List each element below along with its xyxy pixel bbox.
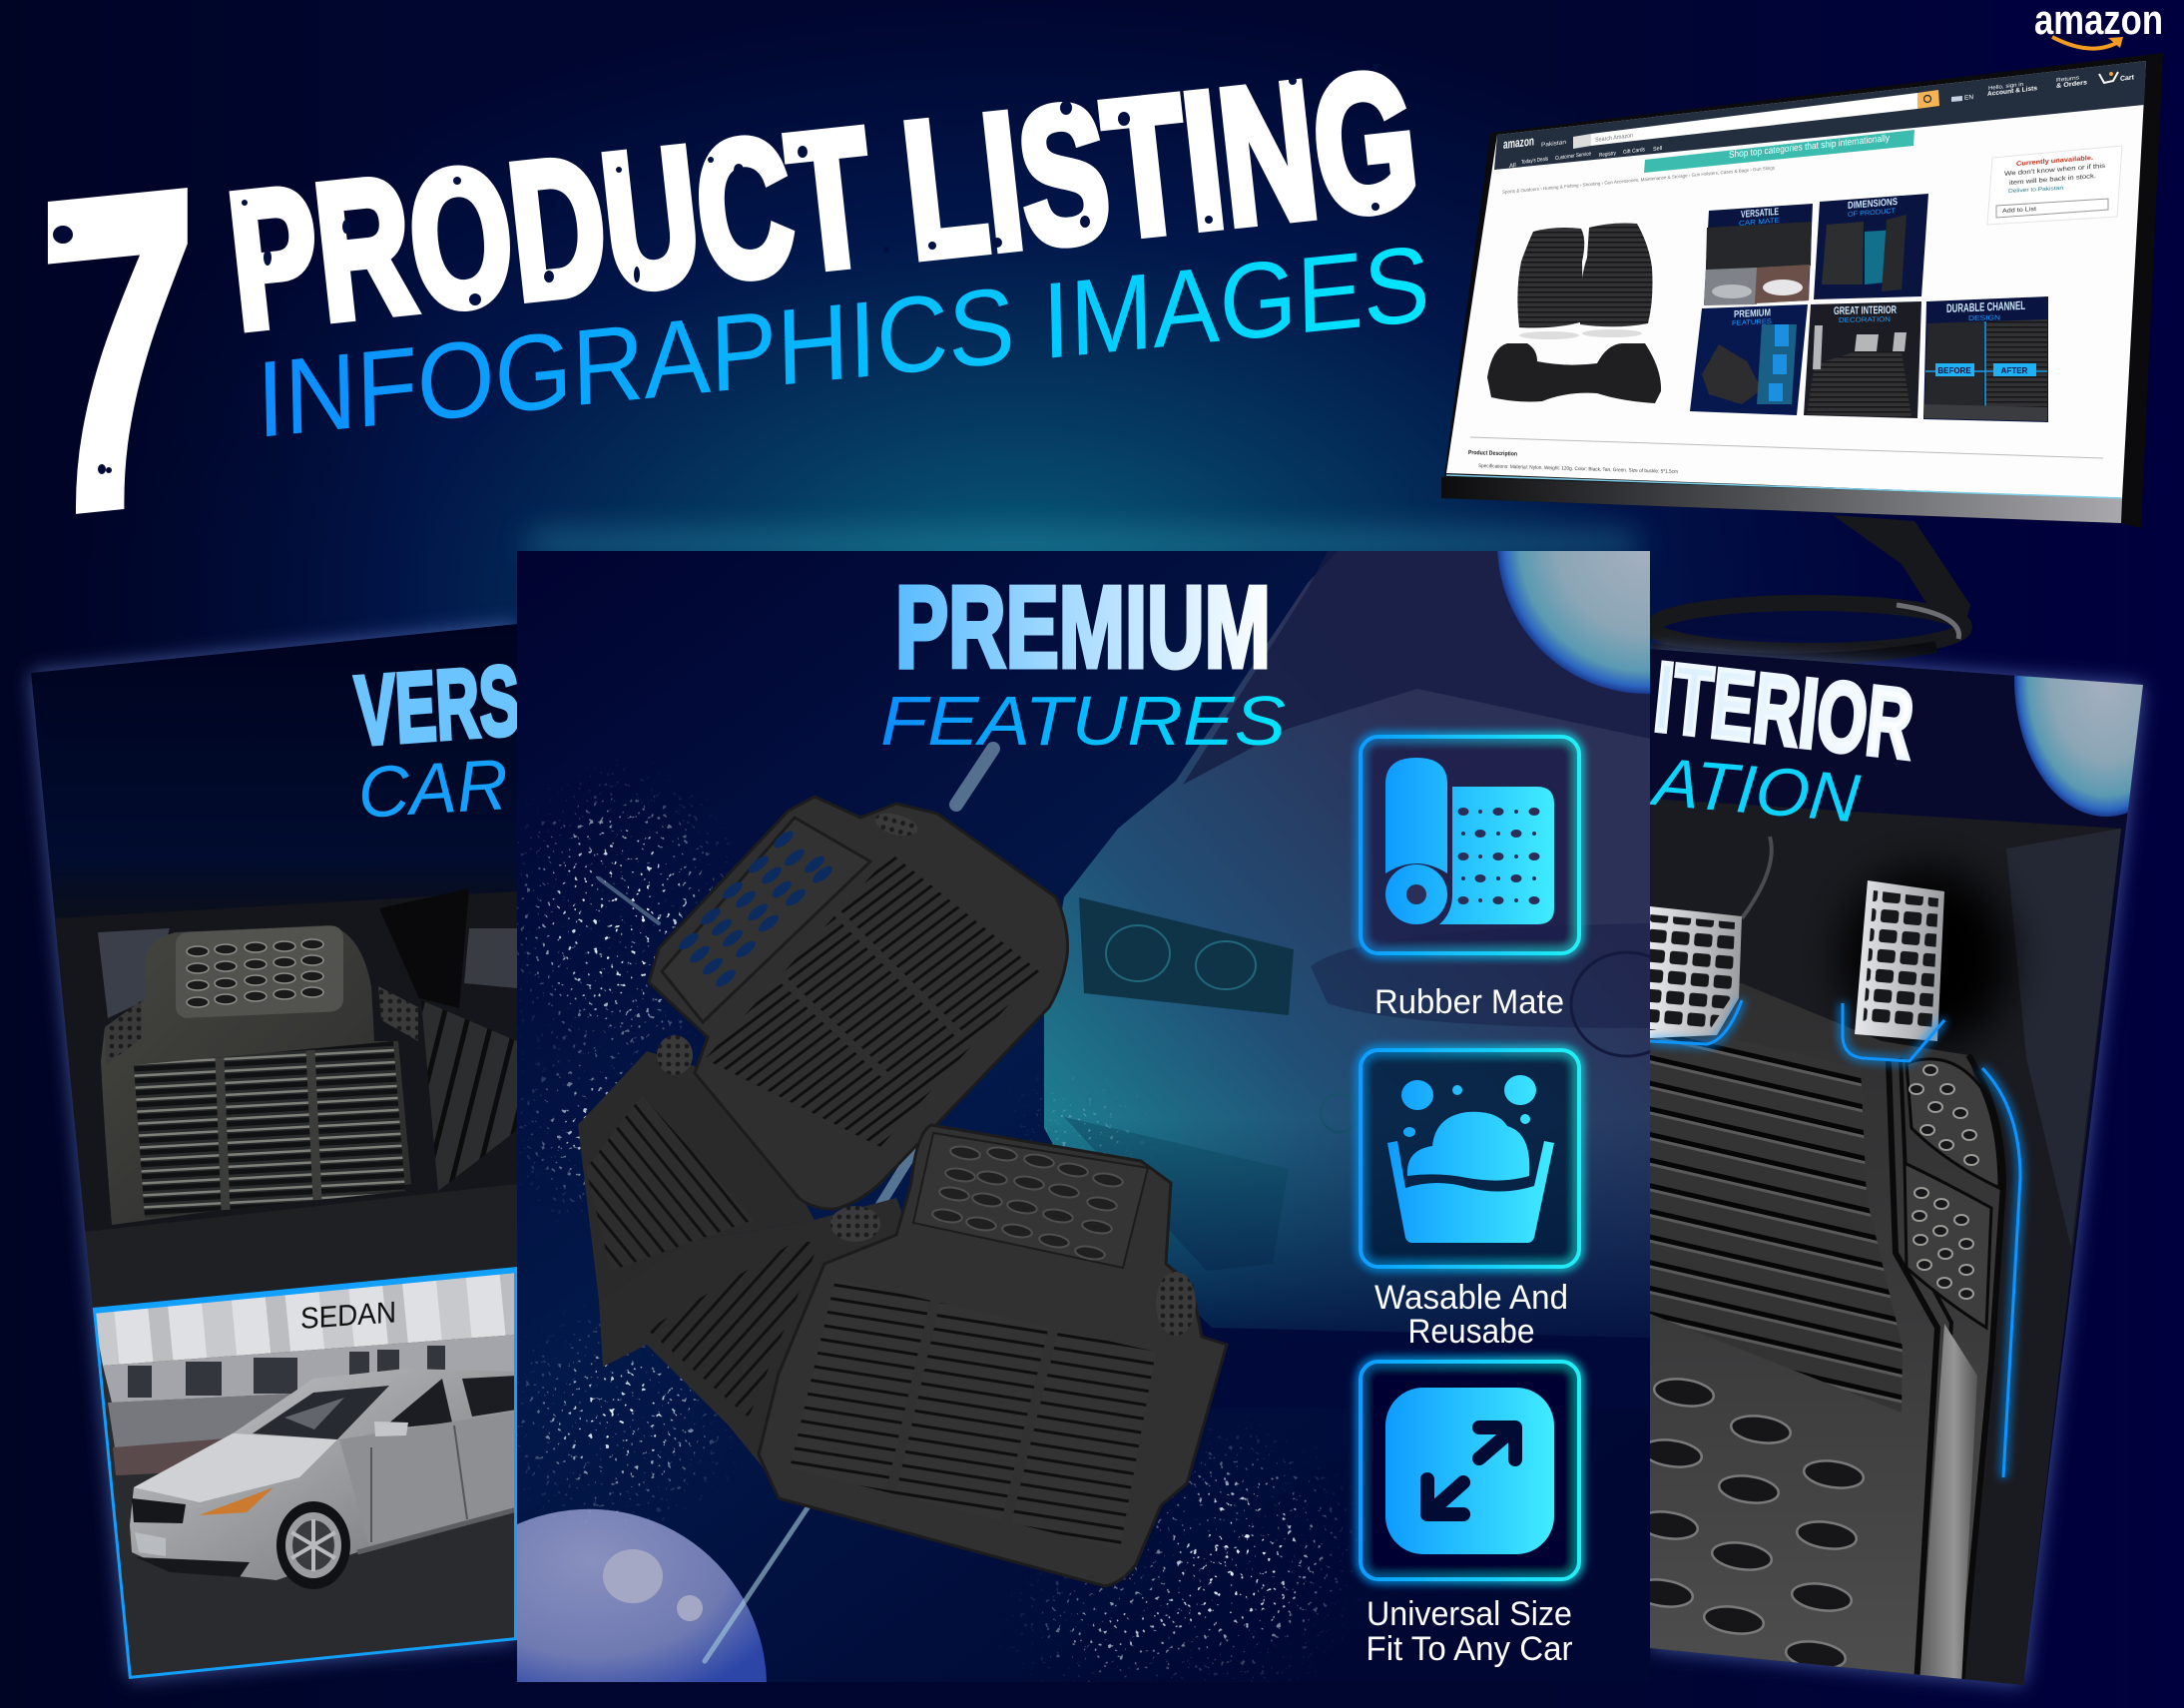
screen bbox=[1446, 61, 2146, 498]
thumbnail: versatile: CAR MATE bbox=[1739, 218, 1780, 228]
thumbnail: versatile bbox=[1704, 204, 1813, 305]
label: universal size bbox=[1365, 1595, 1573, 1668]
thumbnail: premium bbox=[1690, 304, 1808, 415]
rubber mats bbox=[578, 797, 1227, 1586]
thumbnail: durable channel: BEFORE bbox=[1937, 366, 1971, 375]
title bbox=[40, 30, 1430, 605]
heading: infographics images: INFOGRAPHICS IMAGES bbox=[256, 223, 1430, 460]
heading: product listing bbox=[220, 30, 1426, 369]
feature: universal size bbox=[1361, 1362, 1579, 1668]
availability box: We don't know when or if this bbox=[2004, 163, 2106, 178]
amazon nav bar: Hello, sign in bbox=[1988, 82, 2023, 92]
thumbnail: dimensions: DIMENSIONS bbox=[1848, 197, 1898, 212]
icon: resize arrows bbox=[1385, 1388, 1554, 1554]
lower mat bbox=[759, 1125, 1227, 1586]
feature: washable and reusable bbox=[1361, 1050, 1579, 1351]
car interior bbox=[54, 888, 517, 1318]
monitor bbox=[1441, 53, 2163, 660]
main product image bbox=[1487, 224, 1661, 403]
amazon nav bar: Pakistan bbox=[1541, 140, 1566, 149]
numeral 7 bbox=[40, 99, 196, 605]
product description bbox=[1468, 437, 2103, 475]
amazon nav bar: Account & Lists bbox=[1987, 85, 2037, 98]
panel: great interior decoration bbox=[1650, 649, 2143, 1685]
rubber mat closeup bbox=[1631, 983, 2003, 1685]
amazon nav bar bbox=[1494, 61, 2146, 170]
car bbox=[130, 1369, 517, 1589]
label: sedan: SEDAN bbox=[300, 1296, 396, 1336]
amazon nav bar: Today's Deals bbox=[1521, 156, 1548, 166]
amazon nav bar: EN bbox=[1964, 94, 1973, 102]
panel heading: interior decoration: ATION bbox=[1646, 744, 1864, 837]
amazon nav bar: Registry bbox=[1599, 151, 1616, 159]
label: washable: Reusabe bbox=[1407, 1313, 1535, 1351]
icon: rubber roll bbox=[1385, 758, 1554, 924]
bubble bbox=[2014, 675, 2143, 817]
inset: sedan photo bbox=[92, 1267, 517, 1679]
panel: premium features bbox=[517, 551, 1650, 1682]
thumbnail: dimensions: OF PRODUCT bbox=[1848, 208, 1897, 219]
panel heading: interior decoration: ITERIOR bbox=[1650, 641, 1918, 780]
left panel glow bbox=[31, 624, 517, 1679]
amazon nav bar: amazon bbox=[1503, 133, 1534, 152]
thumbnail: durable channel: DURABLE CHANNEL bbox=[1946, 298, 2025, 315]
thumbnail: durable channel: DESIGN bbox=[1968, 314, 2000, 322]
thumbnail: durable channel: AFTER bbox=[2001, 366, 2028, 375]
thumbnail: durable channel bbox=[1923, 296, 2048, 422]
label: universal size: Universal Size bbox=[1366, 1595, 1572, 1633]
heading: premium features bbox=[882, 585, 1286, 745]
upper mat bbox=[649, 797, 1068, 1209]
right panel glow bbox=[1650, 649, 2143, 1685]
availability box bbox=[1987, 146, 2122, 225]
panel heading: vers bbox=[351, 664, 517, 817]
breadcrumb: Sports & Outdoors › Hunting & Fishing › Shooting › Gun Accessories, Maintenance & Storage › Gun Holsters, Cases & Bags › Gun Slings bbox=[1502, 165, 1776, 195]
feature: rubber mate bbox=[1361, 737, 1579, 1021]
amazon nav bar: Sell bbox=[1653, 146, 1662, 153]
thumbnail: versatile: VERSATILE bbox=[1741, 207, 1779, 221]
panel: versatile car mate bbox=[31, 624, 529, 1687]
label: universal size: Fit To Any Car bbox=[1365, 1630, 1573, 1668]
availability box: Add to List bbox=[2002, 207, 2036, 215]
amazon nav bar: & Orders bbox=[2056, 79, 2087, 90]
thumbnail: premium: PREMIUM bbox=[1734, 307, 1771, 320]
rear mat flap bbox=[578, 1051, 911, 1468]
bubble: bottom left bbox=[517, 1509, 767, 1682]
monitor chin bbox=[1441, 477, 2122, 523]
amazon nav bar: Gift Cards bbox=[1623, 147, 1645, 156]
label: rubber mate: Rubber Mate bbox=[1374, 983, 1564, 1021]
amazon nav bar: Returns bbox=[2056, 75, 2079, 84]
thumbnail: great interior bbox=[1804, 301, 1921, 418]
pedals bbox=[1650, 880, 1944, 1041]
panel heading: vers: VERS bbox=[353, 645, 522, 766]
teal banner: Shop top categories that ship internationally bbox=[1729, 133, 1890, 161]
label: washable: Wasable And bbox=[1374, 1279, 1568, 1317]
product description: Product Description bbox=[1468, 450, 1517, 457]
background car bbox=[1044, 551, 1650, 1338]
heading: premium features: PREMIUM bbox=[895, 562, 1271, 692]
thumbnail: dimensions bbox=[1814, 194, 1928, 299]
heading: premium features: FEATURES bbox=[880, 682, 1286, 760]
label: washable bbox=[1374, 1279, 1568, 1351]
panel heading: interior decoration bbox=[1650, 660, 1912, 822]
blue accent lines bbox=[1650, 1000, 2020, 1477]
product description: Specifications: Material: Nylon. Weight: 120g. Color: Black, Tan, Green. Size of buckle: 5*1.5cm bbox=[1478, 463, 1678, 475]
teal banner bbox=[1644, 130, 1914, 173]
water streams bbox=[599, 749, 993, 1661]
thumbnail: great interior: DECORATION bbox=[1839, 316, 1891, 324]
water splash bbox=[517, 768, 1354, 1682]
numeral 7: 7 bbox=[40, 99, 196, 605]
bubble: top right bbox=[1497, 551, 1650, 694]
monitor stand bbox=[1652, 515, 1970, 660]
floor mat bbox=[101, 925, 517, 1225]
amazon nav bar: Customer Service bbox=[1555, 151, 1591, 162]
monitor frame bbox=[1441, 53, 2163, 528]
availability box: Currently unavailable. bbox=[2016, 155, 2093, 168]
availability box: Deliver to Pakistan bbox=[2008, 186, 2063, 195]
panel heading: vers: CAR bbox=[356, 745, 510, 834]
thumbnail: premium: FEATURES bbox=[1732, 318, 1772, 327]
amazon logo bbox=[1994, 0, 2184, 70]
icon: wash basin bbox=[1387, 1075, 1554, 1243]
thumbnail: great interior: GREAT INTERIOR bbox=[1834, 304, 1897, 317]
amazon nav bar: All bbox=[1509, 163, 1516, 170]
amazon nav bar: Search Amazon bbox=[1595, 133, 1633, 144]
availability box: item will be back in stock. bbox=[2009, 173, 2096, 187]
center panel glow bbox=[529, 534, 1637, 554]
amazon nav bar: Cart bbox=[2120, 74, 2135, 83]
